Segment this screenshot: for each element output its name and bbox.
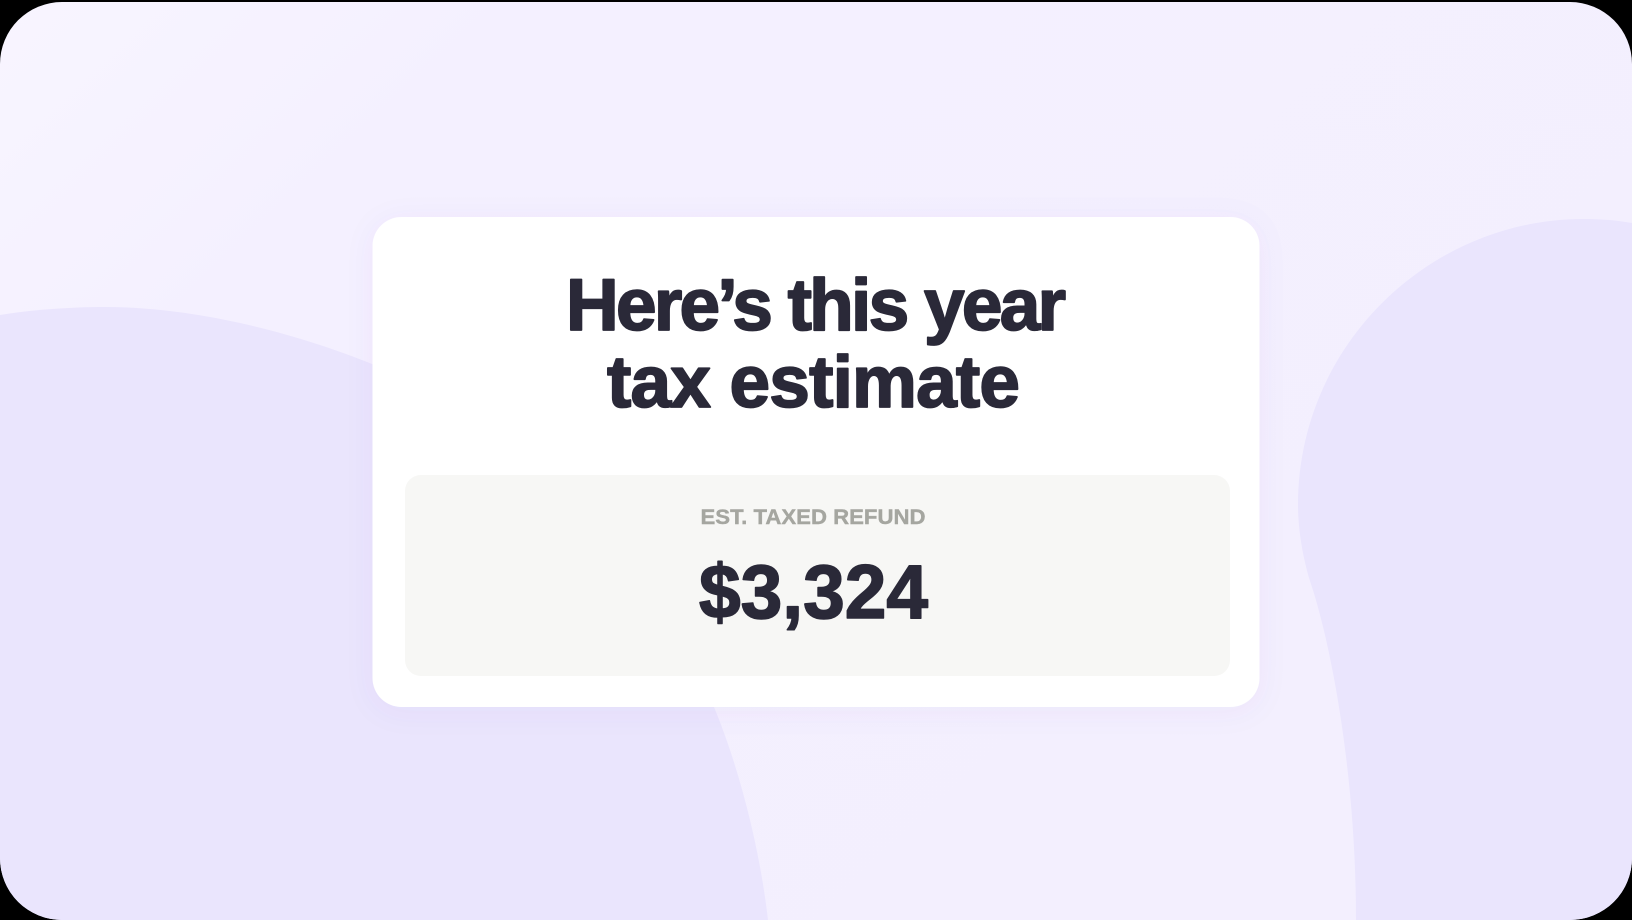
heading: Here’s this year	[566, 265, 1066, 346]
card background	[372, 217, 1260, 707]
right background blob	[1298, 219, 1632, 920]
heading	[566, 265, 1066, 423]
heading: tax estimate	[607, 342, 1020, 423]
panel: refund box	[405, 475, 1230, 676]
panel: estimate card	[372, 217, 1260, 707]
refund amount: $3,324	[699, 550, 928, 635]
left background blob	[0, 307, 768, 920]
refund label: EST. TAXED REFUND	[700, 505, 926, 529]
